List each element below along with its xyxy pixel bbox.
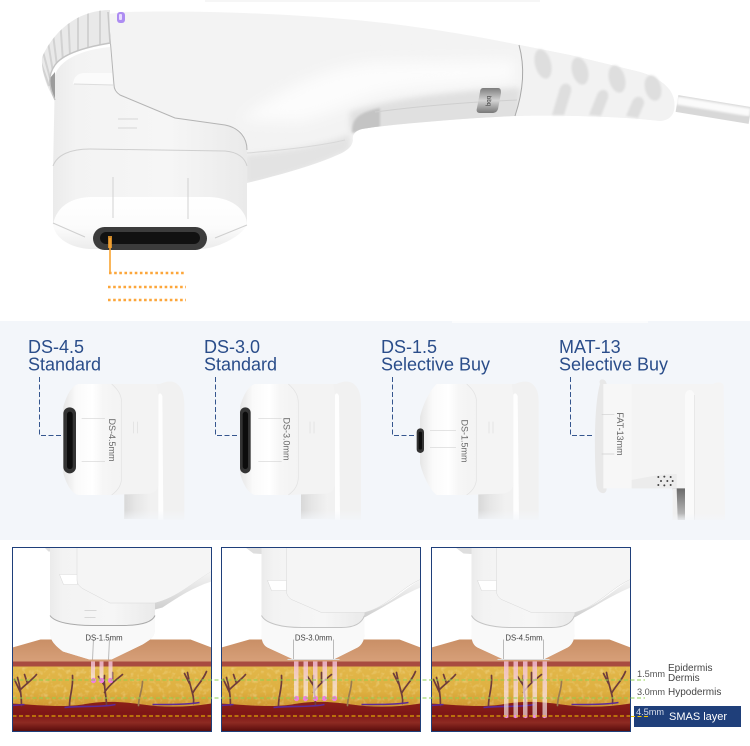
tip label: DS-4.5mm xyxy=(505,634,543,642)
cartridge DS-3.0 xyxy=(204,337,362,523)
cartridge DS-3.0: DS-3.0 xyxy=(204,337,260,357)
panel: cartridge options xyxy=(0,321,750,540)
cartridge DS-1.5 xyxy=(381,337,539,523)
cartridge DS-4.5: Standard xyxy=(28,354,101,374)
cartridge MAT-13 xyxy=(559,337,727,523)
panel: depth 4.5mm xyxy=(432,548,630,732)
cable xyxy=(677,100,750,116)
panel border xyxy=(432,548,630,732)
front cap xyxy=(53,197,247,249)
rear grip ridges xyxy=(515,45,674,121)
panel: depth 1.5mm xyxy=(12,548,212,732)
depth legend: Epidermis xyxy=(668,663,712,674)
handle shading xyxy=(247,72,520,183)
cartridge DS-1.5: DS-1.5 xyxy=(381,337,437,357)
depth guide lines xyxy=(13,680,645,698)
depth legend xyxy=(631,663,741,727)
head body xyxy=(53,47,247,225)
cartridge DS-4.5 xyxy=(28,337,185,523)
cartridge DS-4.5: DS-4.5mm xyxy=(107,418,117,462)
SMAS highlight box xyxy=(634,706,741,727)
cartridge MAT-13: FAT-13mm xyxy=(615,412,625,456)
panel border xyxy=(12,548,212,732)
tip label: DS-1.5mm xyxy=(85,634,123,642)
grip button: bbq xyxy=(485,96,491,106)
main handpiece illustration xyxy=(40,5,750,300)
dial ring xyxy=(40,5,110,100)
depth legend: SMAS layer xyxy=(669,711,727,723)
transducer window xyxy=(93,227,207,250)
handpiece xyxy=(44,548,212,660)
cartridge DS-3.0: DS-3.0mm xyxy=(282,417,292,461)
cartridge DS-1.5: DS-1.5mm xyxy=(460,419,470,463)
cartridge MAT-13: Selective Buy xyxy=(559,354,668,374)
beams xyxy=(91,662,112,682)
panel border xyxy=(222,548,420,732)
tip label: DS-3.0mm xyxy=(295,634,332,642)
focal depth markers xyxy=(108,236,186,300)
depth legend: 1.5mm xyxy=(637,669,665,679)
cartridge DS-1.5: Selective Buy xyxy=(381,354,490,374)
cartridge DS-3.0: Standard xyxy=(204,354,277,374)
cartridge DS-4.5: DS-4.5 xyxy=(28,337,84,357)
panel: depth 3.0mm xyxy=(222,548,420,732)
grip button xyxy=(477,88,501,113)
depth legend: Dermis xyxy=(668,673,700,684)
head details xyxy=(73,73,113,85)
depth legend: 4.5mm xyxy=(636,707,664,717)
depth legend: 3.0mm xyxy=(637,687,665,697)
cartridge MAT-13: MAT-13 xyxy=(559,337,621,357)
handle body xyxy=(108,11,674,183)
LED indicator xyxy=(117,12,125,23)
depth legend: Hypodermis xyxy=(668,687,721,698)
front plate edge xyxy=(108,14,247,150)
